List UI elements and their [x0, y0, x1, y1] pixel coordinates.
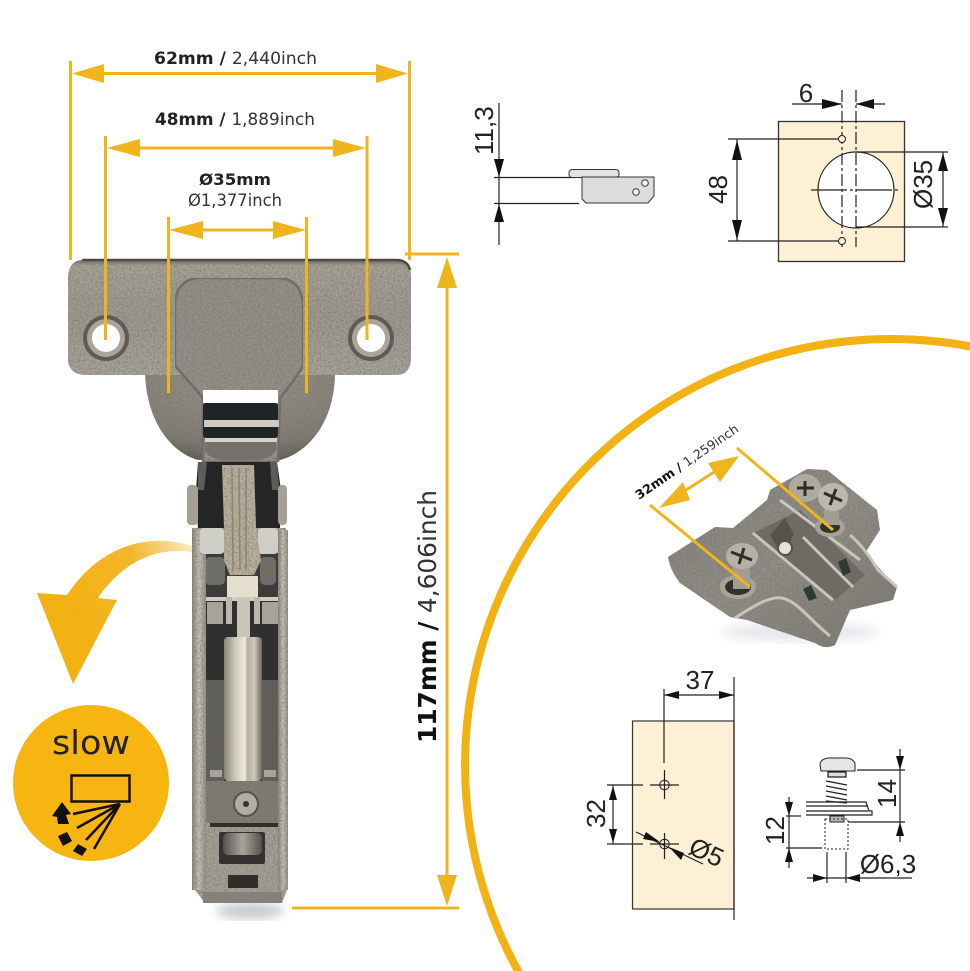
arm upper recess [203, 553, 278, 597]
dimension: 62mm width [70, 49, 410, 260]
inch label: Ø1,377inch [188, 191, 282, 210]
center window [770, 518, 794, 556]
slow close badge [13, 705, 169, 861]
pivot area [206, 781, 278, 823]
dotted pilot hole [825, 819, 848, 849]
dimension 48 [703, 139, 838, 241]
front screw [720, 543, 758, 599]
photo: mounting plate [668, 469, 897, 647]
bottom roller [219, 832, 265, 864]
dimension: 48mm hole spacing [106, 110, 367, 340]
plate slots [803, 558, 851, 601]
curved slow-close arrow [37, 541, 192, 684]
slow label: slow [52, 723, 130, 762]
technical drawing: screw section [760, 749, 916, 883]
dimension 12 [760, 797, 822, 868]
technical drawing: plate drilling [581, 665, 734, 920]
dimension 6 [792, 78, 885, 109]
closing rays [73, 804, 120, 849]
dimension 12: 12 [760, 816, 790, 845]
rotation arrow icon [52, 802, 87, 856]
left rail [192, 530, 206, 890]
screw thread [826, 772, 847, 803]
link block [227, 576, 258, 597]
dimension 48: 48 [703, 175, 733, 204]
pivot rivet [234, 792, 258, 816]
dimension 37 [664, 665, 734, 763]
technical drawing: side profile 11,3 [469, 103, 654, 245]
central channel [753, 510, 865, 600]
hinge floor shadow [216, 903, 284, 919]
dimension diameter 5 [636, 831, 729, 873]
bottom cross bar [210, 823, 278, 827]
62mm label: 62mm / 2,440inch [154, 49, 317, 68]
left mounting hole [83, 315, 129, 361]
mechanism fingers [207, 602, 278, 777]
cream panel [632, 721, 734, 909]
screw tip [830, 816, 844, 822]
door icon [72, 776, 130, 802]
32mm label: 32mm / 1,259inch [632, 421, 741, 502]
plate body [668, 469, 897, 647]
hinge cup flange [145, 372, 335, 460]
dimension: 117mm height [292, 254, 459, 908]
11,3 label: 11,3 [469, 106, 499, 155]
screw holes [838, 136, 846, 142]
35mm label: Ø35mm [199, 170, 271, 189]
dimension: 35mm cup [168, 170, 306, 393]
damper cylinder [224, 637, 262, 781]
hinge mounting plate [68, 260, 411, 375]
dimension 14: 14 [872, 779, 902, 808]
cup hole [818, 152, 894, 228]
hinge profile [569, 170, 619, 178]
117mm label: 117mm / 4,606inch [413, 490, 442, 743]
plastic rollers [200, 528, 278, 554]
arm interior [206, 600, 278, 785]
hinge arm body [192, 528, 288, 903]
dimension 37: 37 [686, 665, 714, 695]
central raised cup boss [175, 278, 303, 462]
plate ridges [735, 500, 897, 636]
dimension 35: Ø35 [908, 160, 938, 209]
dimension diameter 5: Ø5 [684, 831, 729, 873]
dimension 14 [848, 749, 905, 842]
right rail [278, 530, 288, 890]
dimension 6: 6 [799, 78, 813, 108]
hinge window [203, 390, 279, 460]
plate section [806, 802, 872, 815]
technical drawing: cup drilling [703, 78, 948, 262]
cream door panel [778, 122, 904, 262]
dimension 32: 32 [581, 799, 611, 828]
plate shadow [720, 622, 880, 642]
photo: concealed hinge [68, 260, 411, 919]
bottom cap [203, 875, 282, 903]
dimension 32 [581, 785, 643, 844]
hinge neck [187, 462, 287, 530]
48mm label: 48mm / 1,889inch [155, 110, 315, 129]
piston clevis [226, 597, 260, 624]
rear screw [789, 474, 848, 537]
dimension diameter 6,3 [807, 849, 916, 883]
screw head [820, 758, 855, 771]
link plates [222, 465, 261, 575]
yellow circular arc divider [461, 335, 970, 971]
dimension 35 [856, 152, 948, 227]
dimension diameter 6,3: Ø6,3 [860, 849, 916, 879]
right mounting hole [348, 315, 394, 361]
piston rod [237, 598, 250, 638]
dimension: 32mm plate spacing [632, 421, 833, 587]
drill holes [650, 770, 679, 859]
